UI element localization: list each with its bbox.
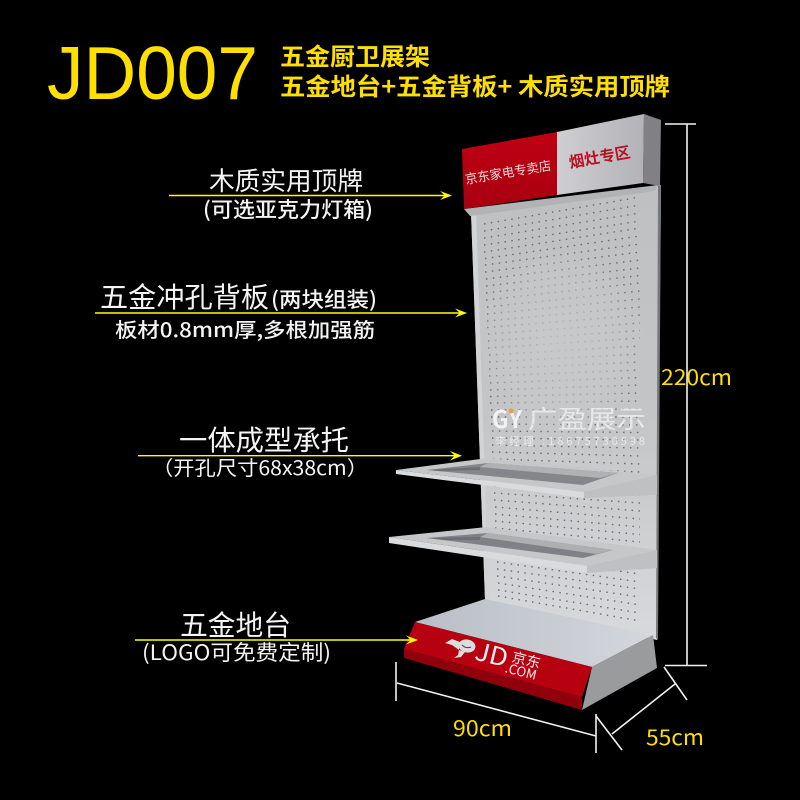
label: back panel: 板材0.8mm厚,多根加强筋 xyxy=(115,314,375,343)
JD logo xyxy=(471,632,544,684)
label: back panel: 五金冲孔背板 xyxy=(100,276,269,316)
top shelf bracket xyxy=(396,458,657,498)
label: shelf: 一体成型承托 xyxy=(179,419,349,459)
label: top sign: 木质实用顶牌 xyxy=(209,161,363,198)
lower shelf bracket xyxy=(389,527,657,573)
dimension values xyxy=(453,362,732,752)
floor base xyxy=(404,599,657,710)
label: shelf xyxy=(152,419,368,481)
header description: 五金厨卫展架 xyxy=(280,37,430,72)
sign text: store name: 京东家电专卖店 xyxy=(464,155,552,188)
JD logo: .COM xyxy=(503,657,539,684)
depth dimension xyxy=(596,667,687,750)
title: model number: JD007 xyxy=(47,31,258,115)
JD logo: 京东 xyxy=(510,647,543,673)
label: base xyxy=(142,604,331,667)
watermark xyxy=(492,400,646,449)
sign text: zone: 烟灶专区 xyxy=(567,140,632,173)
width dimension xyxy=(396,662,596,753)
arrow: back panel xyxy=(95,308,467,318)
watermark: GY xyxy=(492,400,523,435)
arrow: shelf xyxy=(138,451,462,460)
JD logo: JD xyxy=(472,632,512,675)
label: back panel: (两块组装) xyxy=(271,284,377,314)
label: back panel xyxy=(100,276,377,343)
JD mascot xyxy=(445,638,476,658)
arrow: top sign xyxy=(169,191,452,200)
perforation holes xyxy=(484,197,640,621)
label: shelf: （开孔尺寸68x38cm） xyxy=(152,452,368,481)
label: base: (LOGO可免费定制) xyxy=(142,637,331,667)
dimension values: 90cm xyxy=(453,713,512,743)
dimension lines xyxy=(396,124,707,753)
dimension values: 220cm xyxy=(661,362,732,392)
label: base: 五金地台 xyxy=(180,604,291,644)
header description xyxy=(280,37,670,102)
dimension values: 55cm xyxy=(646,722,704,752)
watermark: 李经理 :18675730598 xyxy=(495,433,645,449)
top sign xyxy=(462,114,661,216)
faded reflection over holes xyxy=(475,250,645,440)
watermark: 广盈展示 xyxy=(528,400,646,436)
callout arrows xyxy=(95,191,467,644)
label: top sign xyxy=(203,161,373,224)
header description: 五金地台+五金背板+ 木质实用顶牌 xyxy=(280,67,670,102)
back panel xyxy=(471,185,661,640)
display stand xyxy=(389,114,661,710)
label: top sign: (可选亚克力灯箱) xyxy=(203,194,373,224)
height dimension xyxy=(665,124,707,666)
arrow: base xyxy=(135,636,418,644)
